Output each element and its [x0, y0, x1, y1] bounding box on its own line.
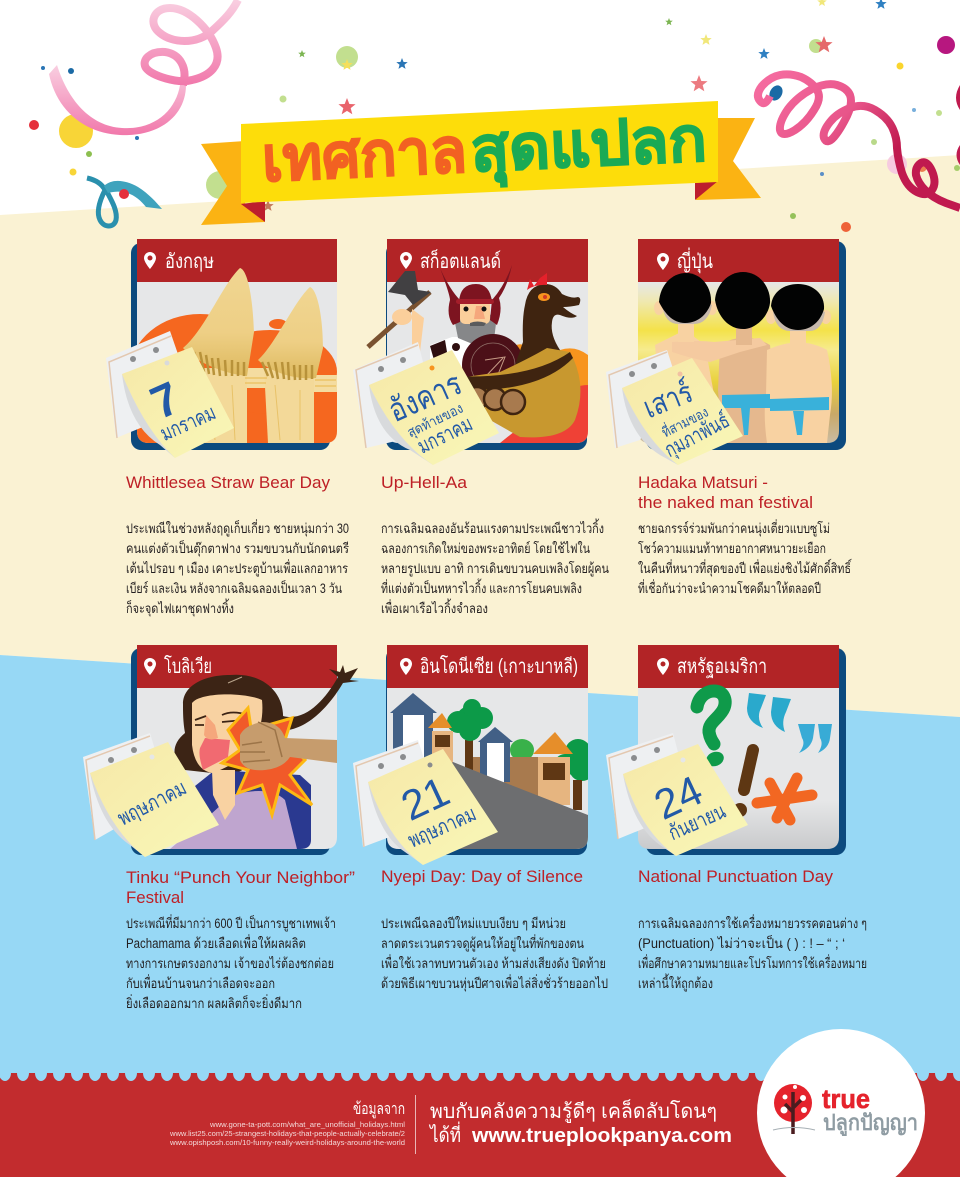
text block: Punctuation: [638, 914, 867, 992]
banner left tail: [201, 141, 265, 225]
country label: [400, 655, 578, 678]
illustration: straw bears: [130, 268, 337, 443]
text block: Up-Hell-Aa: ฉลองการเกิดใหม่ของพระอาทิตย์ โดยใช้ไฟใน: [381, 540, 590, 556]
panel: Indonesia: [353, 645, 595, 865]
text block: Tinku: ยิ่งเลือดออกมาก ผลผลิตก็จะยิ่งดีมาก: [126, 994, 302, 1011]
confetti dots and stars: [29, 0, 960, 232]
text block: Hadaka Matsuri: [638, 519, 852, 596]
text block: Tinku: Pachamama ด้วยเลือดเพื่อให้ผลผลิต: [126, 934, 306, 951]
country label: อังกฤษ: [165, 251, 214, 273]
text block: Hadaka Matsuri: ในคืนที่หนาวที่สุดของปี เพื่อแย่งชิงไม้ศักดิ์สิทธิ์: [638, 558, 852, 577]
text block: Tinku: ประเพณีที่มีมากว่า 600 ปี เป็นการบูชาเทพเจ้า: [126, 914, 336, 932]
banner yellow strip: [241, 101, 718, 203]
text block: Nyepi: เพื่อใช้เวลาทบทวนตัวเอง ห้ามส่งเสียงดัง ปิดท้าย: [381, 954, 606, 971]
footer call to action: พบกับคลังความรู้ดีๆ เคล็ดลับโดนๆ: [430, 1098, 717, 1124]
text block: Nyepi: ประเพณีฉลองปีใหม่แบบเงียบ ๆ มีหน่วย: [381, 915, 566, 931]
calendar: 21 May: [353, 740, 498, 865]
text block: Up-Hell-Aa: [381, 518, 609, 616]
logo: ปลูกปัญญา: [823, 1110, 918, 1137]
banner right tail: [696, 118, 761, 200]
logo: [773, 1084, 918, 1137]
calendar: 21 May: 21: [394, 767, 456, 830]
country label: ญี่ปุ่น: [677, 247, 713, 274]
footer sources: www.gone-ta-pott.com/what_are_unofficial_holidays.html: [209, 1120, 405, 1129]
text block: Whittlesea: [126, 519, 349, 617]
text block: Whittlesea: คนแต่งตัวเป็นตุ๊กตาฟาง รวมขบวนกับนักดนตรี: [126, 539, 349, 557]
country label: โบลิเวีย: [164, 655, 212, 678]
text block: Tinku: [126, 914, 336, 1011]
panel: Scotland: [353, 239, 588, 465]
background: cream band: [0, 155, 960, 717]
text block: Hadaka Matsuri: โชว์ความแมนท้าทายอากาศหนาวยะเยือก: [638, 540, 826, 556]
text block: Nyepi: [381, 915, 608, 992]
calendar: last Tuesday of January: สุดท้ายของ: [405, 400, 466, 441]
text block: Up-Hell-Aa: การเฉลิมฉลองอันร้อนแรงตามประเพณีชาวไวกิ้ง: [381, 518, 604, 536]
text block: Hadaka Matsuri: ที่เชื่อกันว่าจะนำความโชคดีมาให้ตลอดปี: [638, 579, 821, 596]
calendar: 24 September: กันยายน: [665, 800, 729, 845]
title banner: [201, 101, 761, 225]
calendar: 7 January: [106, 331, 234, 458]
panel: Bolivia: [83, 645, 359, 857]
calendar: third Saturday of February: [606, 350, 743, 465]
illustration: village and road: [390, 693, 595, 849]
ribbon: pink top left: [49, 0, 238, 135]
calendar: third Saturday of February: กุมภาพันธ์: [660, 408, 734, 463]
heading: Nyepi Day: Nyepi Day: Day of Silence: [381, 868, 583, 886]
country label: สหรัฐอเมริกา: [677, 656, 767, 678]
text block: Up-Hell-Aa: หลายรูปแบบ อาทิ การเดินขบวนคบเพลิงโดยผู้คน: [381, 560, 609, 577]
panel: England: [106, 239, 337, 458]
text block: Whittlesea: เบียร์ และเงิน หลังจากเฉลิมฉลองเป็นเวลา 3 วัน: [126, 579, 342, 596]
calendar: last Tuesday of January: อังคาร: [383, 365, 467, 429]
heading: Whittlesea Straw Bear Day: Whittlesea Straw Bear Day: [126, 474, 331, 492]
calendar: May: พฤษภาคม: [114, 776, 190, 830]
calendar: May: [83, 733, 219, 857]
title text: [260, 105, 708, 198]
text block: Whittlesea: เต้นไปรอบ ๆ เมือง เคาะประตูบ้านเพื่อแลกอาหาร: [126, 559, 348, 577]
illustration: punctuation marks: [697, 691, 832, 820]
title text: เทศกาล: [260, 116, 468, 195]
text block: Tinku: กับเพื่อนบ้านจนกว่าเลือดจะออก: [126, 974, 275, 991]
text block: Nyepi: ด้วยพิธีเผาขบวนหุ่นปีศาจเพื่อไล่สิ่งชั่วร้ายออกไป: [381, 974, 608, 992]
heading: Tinku: Festival: [126, 889, 184, 907]
ribbon: teal left: [87, 178, 162, 226]
illustration: three men from behind: [654, 272, 832, 443]
heading: Hadaka Matsuri: [638, 474, 813, 512]
calendar: 24 September: [606, 733, 748, 856]
text block: Punctuation: เหล่านี้ให้ถูกต้อง: [638, 973, 713, 992]
country label: [657, 247, 713, 274]
heading: Up-Hell-Aa: Up-Hell-Aa: [381, 474, 468, 492]
calendar: last Tuesday of January: มกราคม: [414, 412, 476, 458]
calendar: 7 January: 7: [143, 371, 187, 429]
heading: Hadaka Matsuri: Hadaka Matsuri -: [638, 474, 768, 492]
heading: Tinku: [126, 869, 355, 907]
footer sources: ข้อมูลจาก: [353, 1100, 405, 1119]
footer call to action: www.trueplookpanya.com: [471, 1125, 732, 1147]
country label: อินโดนีเซีย (เกาะบาหลี): [420, 655, 578, 678]
footer sources: www.list25.com/25-strangest-holidays-that-people-actually-celebrate/2: [169, 1129, 405, 1138]
calendar: 21 May: พฤษภาคม: [405, 802, 480, 853]
footer sources: [169, 1100, 405, 1147]
country label: [400, 248, 501, 273]
logo circle: [757, 1029, 925, 1177]
country label: [657, 656, 767, 678]
calendar: last Tuesday of January: [353, 342, 499, 465]
footer sources: www.opishposh.com/10-funny-really-weird-holidays-around-the-world: [169, 1138, 405, 1147]
panel: Japan: [606, 239, 846, 465]
calendar: 7 January: มกราคม: [157, 401, 219, 446]
text block: Up-Hell-Aa: เพื่อเผาเรือไวกิ้งจำลอง: [381, 598, 488, 616]
illustration: viking and longboat: [368, 265, 588, 443]
text block: Whittlesea: ประเพณีในช่วงหลังฤดูเก็บเกี่ยว ชายหนุ่มกว่า 30: [126, 519, 349, 537]
title text: สุดแปลก: [469, 105, 708, 188]
logo: true: [822, 1084, 870, 1114]
text block: Punctuation: (Punctuation) ไม่ว่าจะเป็น ( ) : ! – “ ; ‘: [638, 934, 845, 951]
text block: Hadaka Matsuri: ชายฉกรรจ์ร่วมพันกว่าคนนุ่งเตี่ยวแบบซูโม่: [638, 519, 830, 537]
heading: National Punctuation Day: National Punctuation Day: [638, 868, 834, 886]
country label: [144, 655, 212, 678]
text block: Nyepi: ลาดตระเวนตรวจดูผู้คนให้อยู่ในที่พักของตน: [381, 934, 584, 952]
country label: สก็อตแลนด์: [420, 248, 501, 273]
text block: Whittlesea: ก็จะจุดไฟเผาชุดฟางทิ้ง: [126, 598, 234, 617]
text block: Punctuation: เพื่อศึกษาความหมายและโปรโมทการใช้เครื่องหมาย: [638, 954, 867, 971]
calendar: third Saturday of February: เสาร์: [638, 375, 698, 425]
text block: Tinku: ทางการเกษตรงอกงาม เจ้าของไร่ต้องชกต่อย: [126, 956, 334, 971]
ribbon: pink red right: [758, 74, 960, 208]
calendar: third Saturday of February: ที่สามของ: [659, 403, 711, 440]
icon: tree: [773, 1084, 815, 1134]
banner left fold: [241, 201, 265, 222]
heading: Tinku: Tinku “Punch Your Neighbor”: [126, 869, 355, 887]
text block: Punctuation: การเฉลิมฉลองการใช้เครื่องหมายวรรคตอนต่าง ๆ: [638, 914, 867, 931]
banner right fold: [695, 181, 718, 200]
illustration: punch in the face: [170, 665, 359, 849]
background: blue band: [0, 655, 960, 1090]
heading: Hadaka Matsuri: the naked man festival: [638, 494, 813, 512]
calendar: 24 September: 24: [647, 766, 709, 829]
text block: Up-Hell-Aa: ที่แต่งตัวเป็นทหารไวกิ้ง และการโยนคบเพลิง: [381, 578, 582, 596]
scallops: [0, 1073, 960, 1081]
footer call to action: [428, 1098, 732, 1147]
panel: USA: [606, 645, 846, 856]
country label: [144, 251, 214, 273]
footer band with scalloped edge: [0, 1073, 960, 1177]
footer call to action: ได้ที่: [428, 1121, 461, 1147]
